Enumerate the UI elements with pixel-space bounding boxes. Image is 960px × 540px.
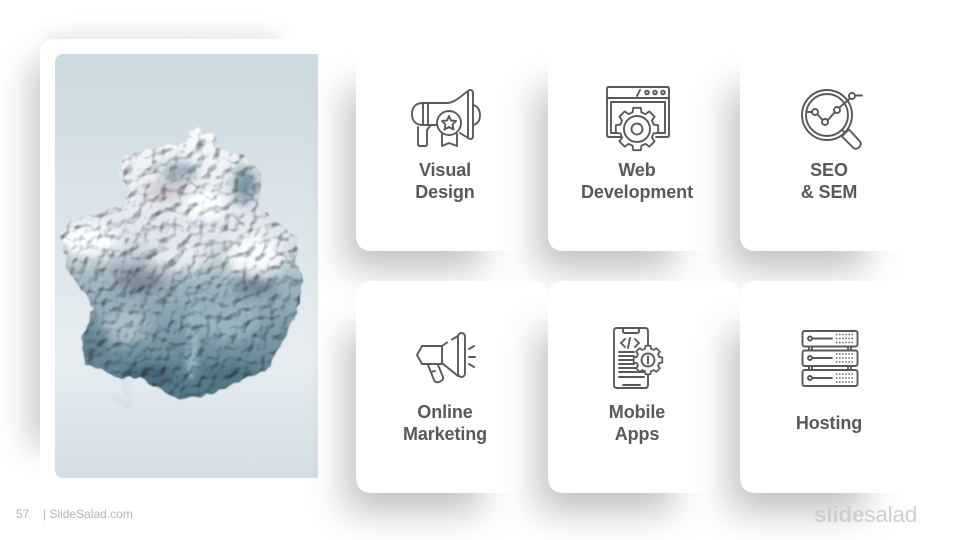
- label: Visual Design: [415, 160, 475, 202]
- label: Visual Design: Visual: [419, 160, 471, 180]
- label: Online Marketing: Online: [417, 402, 473, 422]
- icon: smartphone with code and gear: [613, 327, 664, 389]
- footer: page number and site: | SlideSalad.com: [43, 507, 133, 521]
- label: Web Development: Development: [581, 182, 693, 202]
- card: SEO & SEM: [740, 39, 932, 251]
- card: Web Development: [548, 39, 740, 251]
- icon: browser window with gear: [606, 86, 670, 152]
- label: SEO & SEM: SEO: [810, 160, 848, 180]
- label: Web Development: [581, 160, 693, 202]
- label: Web Development: Web: [618, 160, 656, 180]
- icon: megaphone with award medal: [411, 89, 481, 147]
- card: Hosting: [740, 281, 932, 493]
- card: Visual Design: [356, 39, 548, 251]
- logo: slidesalad: slidesalad: [814, 502, 917, 527]
- card: Online Marketing: [356, 281, 548, 493]
- card: Mobile Apps: [548, 281, 740, 493]
- label: Online Marketing: [403, 402, 487, 444]
- label: Mobile Apps: Mobile: [609, 402, 665, 422]
- label: Mobile Apps: [609, 402, 665, 444]
- icon: megaphone: [416, 332, 476, 384]
- footer: page number and site: 57: [16, 507, 29, 521]
- icon: magnifier with line chart: [801, 89, 863, 150]
- label: Hosting: Hosting: [796, 413, 862, 433]
- label: Mobile Apps: Apps: [615, 424, 659, 444]
- label: SEO & SEM: [801, 160, 857, 202]
- photo: cloud of smoke: [55, 54, 318, 478]
- label: Visual Design: Design: [415, 182, 475, 202]
- icon: server rack: [802, 330, 858, 387]
- panel: image frame: [40, 39, 318, 478]
- label: SEO & SEM: & SEM: [801, 182, 857, 202]
- label: Online Marketing: Marketing: [403, 424, 487, 444]
